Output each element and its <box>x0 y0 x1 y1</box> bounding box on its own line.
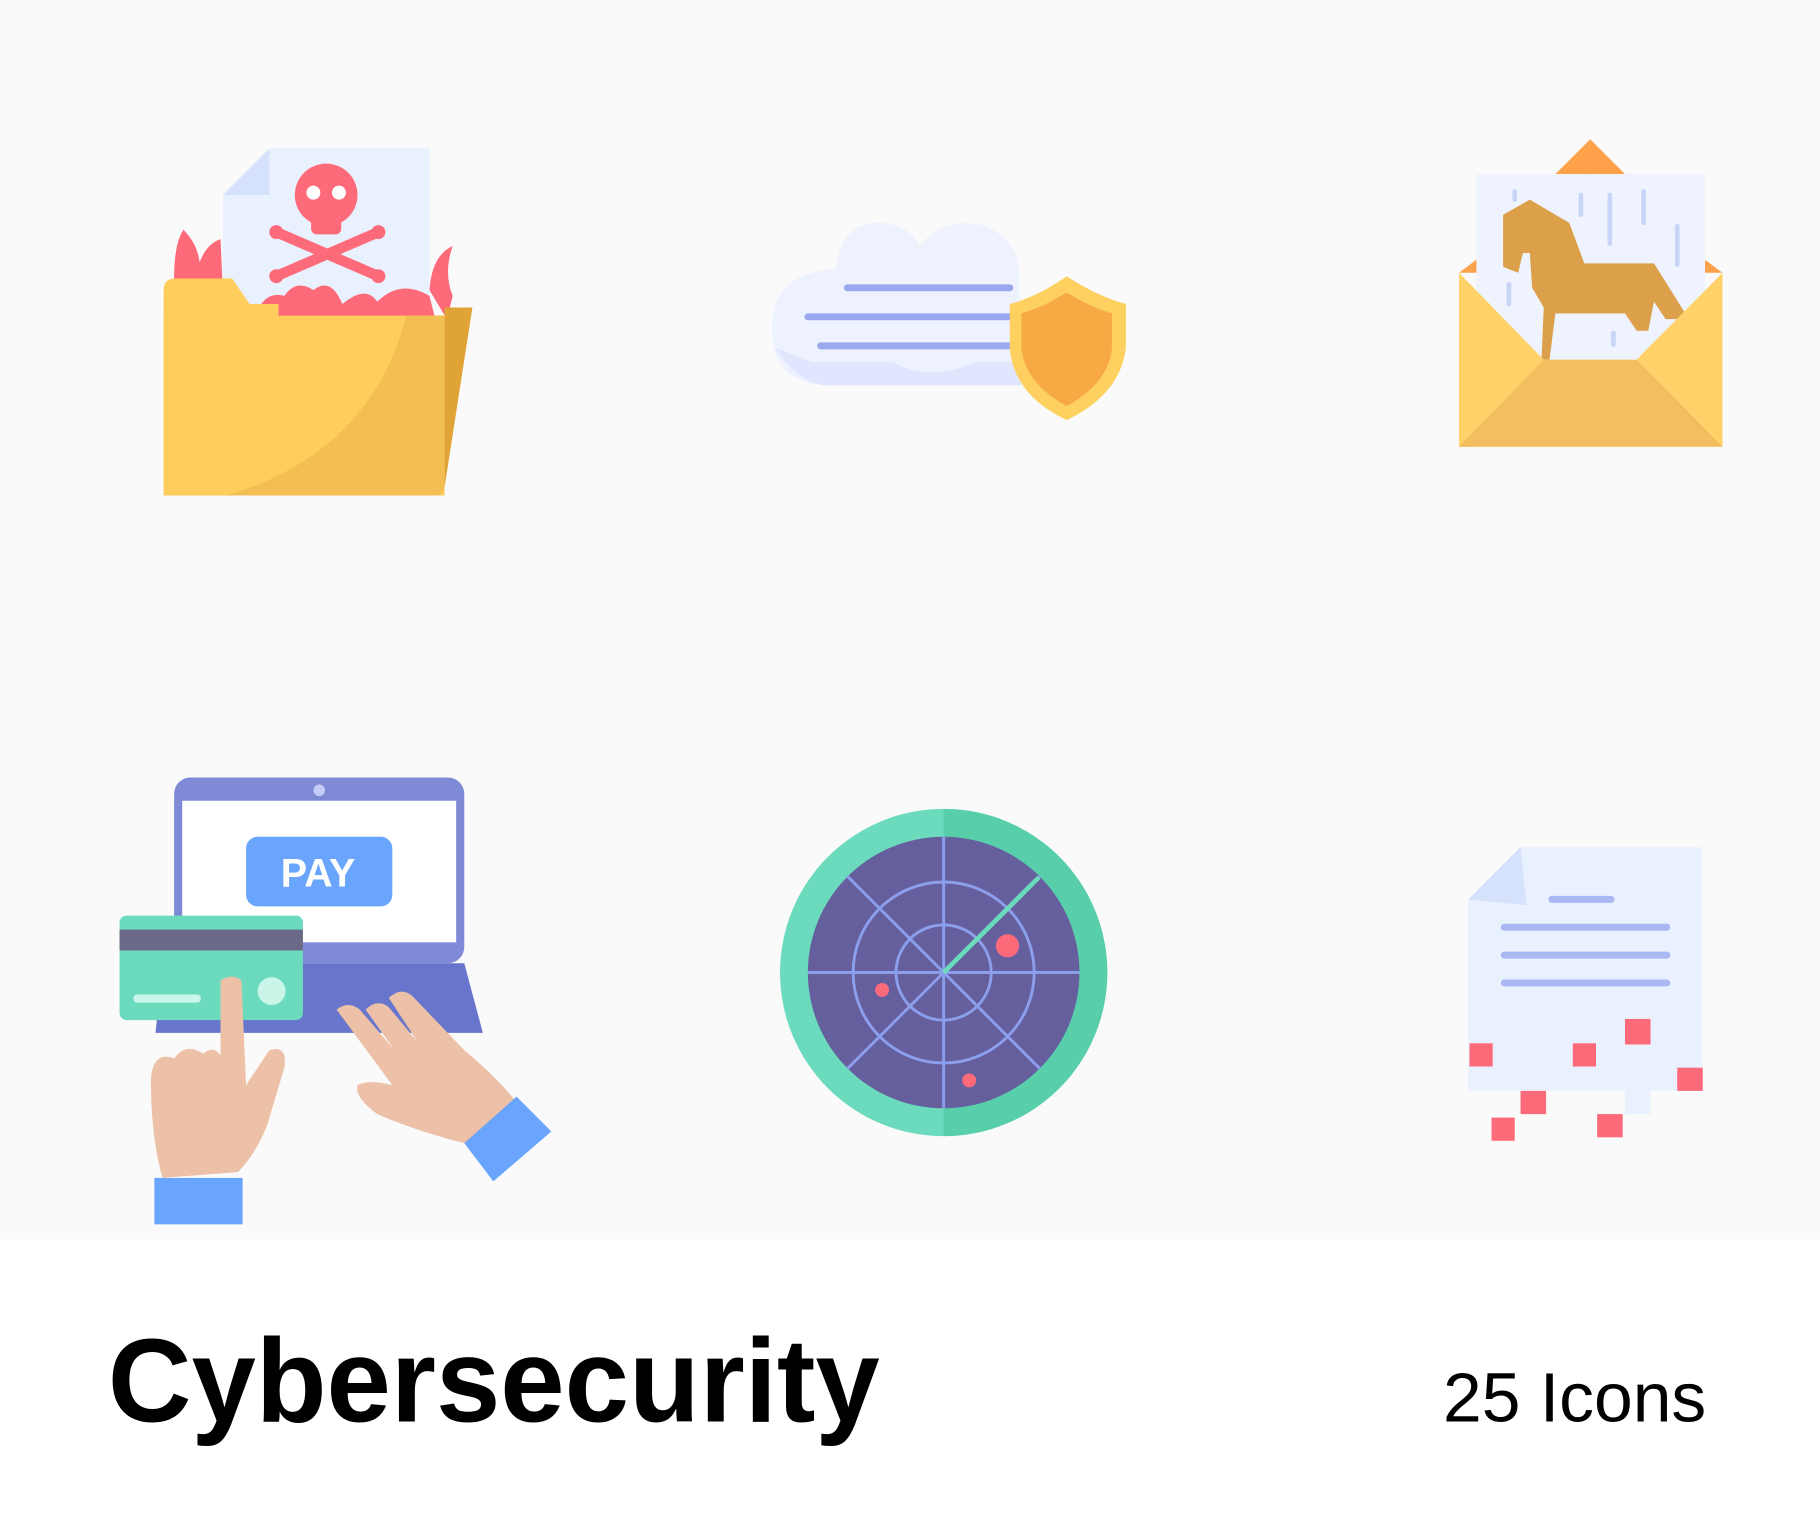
subtitle: icon count: 25 Icons <box>1443 1359 1706 1437</box>
icon: cloud with shield <box>772 223 1126 420</box>
title: Cybersecurity <box>108 1316 880 1448</box>
icon: laptop payment <box>120 778 551 1224</box>
icon: laptop payment: PAY <box>281 852 355 896</box>
icon: radar <box>780 809 1107 1136</box>
icon: corrupted document <box>1468 847 1703 1141</box>
icon: burning folder <box>164 149 472 496</box>
icon: trojan horse email <box>1459 139 1722 447</box>
